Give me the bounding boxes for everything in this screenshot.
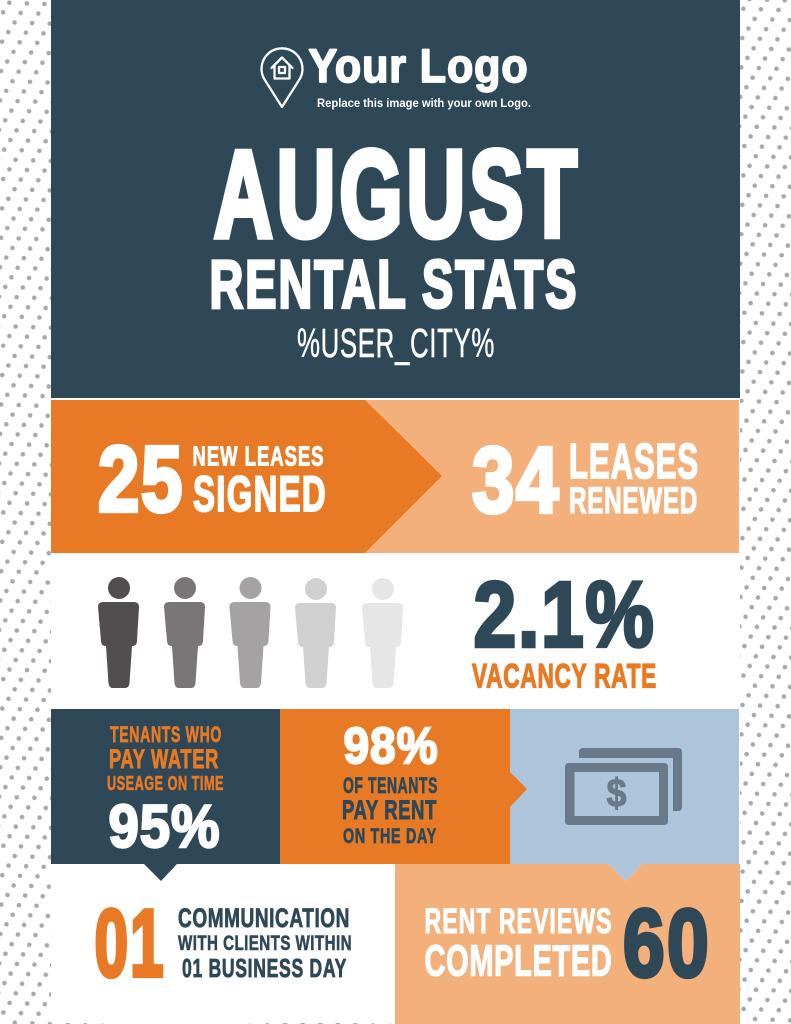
stat: vacancy rate [472,562,657,696]
label: 01 business day: 01 BUSINESS DAY [182,953,347,983]
panel: leases renewed background [365,400,739,553]
icon: map pin with house [262,48,302,107]
icon: person 2 [164,577,205,688]
value: 60: 60 [623,890,711,997]
stat: 34: 34 [472,428,560,532]
value: 2.1%: 2.1% [474,562,656,666]
panel: new leases signed arrow [51,400,442,553]
logo wordmark: Your Logo [308,39,528,92]
label: leases: LEASES [569,435,699,489]
stat: 25: 25 [98,427,184,531]
label: renewed: RENEWED [569,480,698,521]
city placeholder: %USER_CITY% [297,320,495,366]
panel: water payment [51,709,280,881]
icon row: five people fading [98,577,403,688]
label: rent reviews: RENT REVIEWS [424,902,612,941]
label: new leases: NEW LEASES [192,441,324,472]
label: signed: SIGNED [193,466,327,522]
label: with clients within: WITH CLIENTS WITHIN [178,932,352,955]
panel: rent on the day [280,709,527,864]
label: completed: COMPLETED [424,936,612,986]
panel: money icon [510,709,739,881]
label: of tenants: OF TENANTS [343,773,438,798]
panel: communication [94,890,352,997]
icon: banknotes [565,748,682,825]
value: 98%: 98% [344,717,438,774]
panel: leases renewed text [472,428,699,532]
label: communication: COMMUNICATION [178,903,350,933]
panel: header [51,0,740,398]
label: useage on time: USEAGE ON TIME [107,773,224,795]
label: on the day: ON THE DAY [343,825,437,848]
label: pay rent: PAY RENT [342,795,437,825]
icon: person 1 [98,577,139,688]
value: 01: 01 [94,890,166,997]
logo tagline: Replace this image with your own Logo. [317,98,531,110]
label: tenants who: TENANTS WHO [110,722,222,747]
icon: person 3 [230,577,270,688]
panel: rent reviews [395,864,740,1024]
icon: person 5 [362,578,403,688]
icon: person 4 [295,578,336,688]
subtitle: Rental Stats: RENTAL STATS [210,247,578,323]
title: August: AUGUST [214,126,581,264]
icon: banknotes: $ [606,772,626,816]
label: vacancy rate: VACANCY RATE [472,658,657,696]
logo [262,39,531,110]
label: pay water: PAY WATER [109,744,219,774]
value: 95%: 95% [108,793,220,860]
